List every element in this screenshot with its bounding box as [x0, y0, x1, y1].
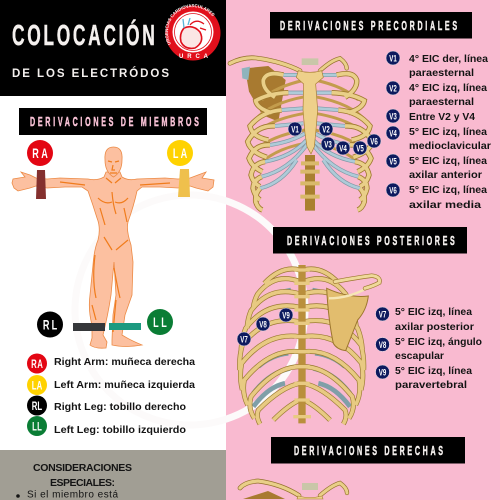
- V9 item: [376, 365, 472, 391]
- legend LA: LA: [32, 380, 43, 393]
- marker V3: [321, 137, 335, 151]
- header panel: [0, 0, 226, 96]
- V2 item: paraesternal: [409, 96, 474, 108]
- V7 item: 5° EIC izq, línea: [395, 306, 472, 318]
- front rib cage illustration: [230, 58, 372, 211]
- V6 item: axilar media: [409, 199, 481, 211]
- heading: derivaciones precordiales: DERIVACIONES PRECORDIALES: [280, 20, 457, 34]
- heading: derivaciones derechas: DERIVACIONES DERECHAS: [294, 445, 443, 459]
- V5 item: 5° EIC izq, línea: [409, 155, 487, 167]
- V8 item: escapular: [395, 350, 444, 362]
- LL badge: LL: [153, 314, 167, 331]
- RL badge: RL: [43, 316, 57, 333]
- V6 item: V6: [389, 185, 397, 196]
- legend RA: Right Arm: muñeca derecha: [54, 356, 195, 368]
- V9 item: paravertebral: [395, 379, 467, 391]
- logo: URCA: [165, 4, 220, 60]
- LA strap: [178, 169, 190, 197]
- marker V2: V2: [322, 124, 330, 135]
- LL strap: [109, 323, 141, 330]
- panel: consideraciones especiales: [0, 450, 226, 500]
- V8 item: V8: [379, 339, 387, 350]
- marker V5: V5: [356, 143, 364, 154]
- RA strap: [36, 170, 46, 199]
- marker V4: V4: [339, 143, 347, 154]
- marker V9: [279, 308, 293, 322]
- marker V2: [319, 122, 333, 136]
- legend RA: RA: [31, 359, 43, 372]
- marker V8: V8: [259, 319, 267, 330]
- V3 item: Entre V2 y V4: [409, 111, 475, 123]
- marker V5: [353, 141, 367, 155]
- body figure with limb electrodes: [12, 140, 214, 348]
- V8 item: 5° EIC izq, ángulo: [395, 336, 482, 348]
- V4 item: 5° EIC izq, línea: [409, 126, 487, 138]
- V1 item: 4° EIC der, línea: [409, 53, 488, 65]
- chart: front rib cage with V1-V6: [230, 58, 381, 211]
- V9 item: V9: [379, 367, 387, 378]
- V5 item: [386, 154, 487, 181]
- V1 item: V1: [389, 53, 397, 64]
- legend RL: Right Leg: tobillo derecho: [54, 401, 186, 413]
- posterior lead list: [376, 306, 482, 391]
- legend LL: Left Leg: tobillo izquierdo: [54, 424, 186, 436]
- legend LL: LL: [32, 421, 42, 434]
- title: COLOCACIÓN: [12, 18, 155, 52]
- LA badge: [167, 140, 193, 166]
- marker V3: V3: [324, 139, 332, 150]
- marker V8: [256, 317, 270, 331]
- V4 item: medioclavicular: [409, 140, 491, 152]
- marker V1: [288, 122, 302, 136]
- V4 item: [386, 126, 491, 152]
- heading: derivaciones derechas: [271, 437, 465, 464]
- subtitle: DE LOS ELECTRÓDOS: [12, 67, 169, 80]
- white background watermark: [75, 195, 305, 425]
- heading: derivaciones posteriores: [273, 227, 467, 254]
- RA badge: [27, 140, 53, 166]
- panel heading: [33, 462, 132, 489]
- V6 item: 5° EIC izq, línea: [409, 184, 487, 196]
- V7 item: axilar posterior: [395, 321, 474, 333]
- V2 item: [386, 81, 487, 108]
- legend LA: Left Arm: muñeca izquierda: [54, 379, 195, 391]
- pink background panel: [226, 0, 500, 500]
- limb legend: [27, 354, 195, 436]
- heading: derivaciones posteriores: DERIVACIONES POSTERIORES: [287, 235, 455, 249]
- V7 item: V7: [379, 309, 387, 320]
- LL badge: [147, 309, 173, 335]
- marker V7: V7: [240, 334, 248, 345]
- RL strap: [73, 323, 105, 331]
- precordial lead list: [386, 51, 491, 211]
- heading: derivaciones de miembros: [19, 108, 207, 135]
- marker V6: [367, 134, 381, 148]
- legend RA: [27, 354, 195, 374]
- logo: URCA: URGENCIAS CARDIOVASCULARES: [165, 4, 214, 46]
- chart: right-side rib cage, top portion visible above the page edge: [240, 481, 347, 499]
- V9 item: 5° EIC izq, línea: [395, 365, 472, 377]
- V5 item: axilar anterior: [409, 169, 482, 181]
- V8 item: [376, 336, 482, 362]
- heading: derivaciones precordiales: [270, 12, 472, 38]
- panel heading: ESPECIALES:: [50, 477, 115, 489]
- V3 item: [386, 109, 475, 123]
- marker V6: V6: [370, 136, 378, 147]
- human body: [12, 147, 214, 348]
- legend RL: RL: [32, 401, 42, 414]
- LA badge: LA: [173, 145, 188, 162]
- marker V7: [237, 332, 251, 346]
- V7 item: [376, 306, 474, 333]
- V1 item: paraesternal: [409, 67, 474, 79]
- panel heading: CONSIDERACIONES: [33, 462, 132, 474]
- RL badge: [37, 312, 63, 338]
- V3 item: V3: [389, 111, 397, 122]
- RA badge: RA: [32, 145, 48, 162]
- legend RL: [27, 396, 186, 416]
- V1 item: [386, 51, 488, 79]
- V5 item: V5: [389, 156, 397, 167]
- chart: back rib cage with V7-V9: [237, 265, 380, 424]
- marker V9: V9: [282, 310, 290, 321]
- V2 item: V2: [389, 83, 397, 94]
- V4 item: V4: [389, 128, 397, 139]
- back rib cage illustration: [240, 265, 380, 424]
- marker V1: V1: [291, 124, 299, 135]
- V6 item: [386, 183, 487, 211]
- legend LL: [27, 416, 186, 436]
- marker V4: [336, 141, 350, 155]
- legend LA: [27, 375, 195, 395]
- logo: URCA: URCA: [179, 54, 209, 60]
- V2 item: 4° EIC izq, línea: [409, 82, 487, 94]
- heading: derivaciones de miembros: DERIVACIONES DE MIEMBROS: [30, 116, 199, 130]
